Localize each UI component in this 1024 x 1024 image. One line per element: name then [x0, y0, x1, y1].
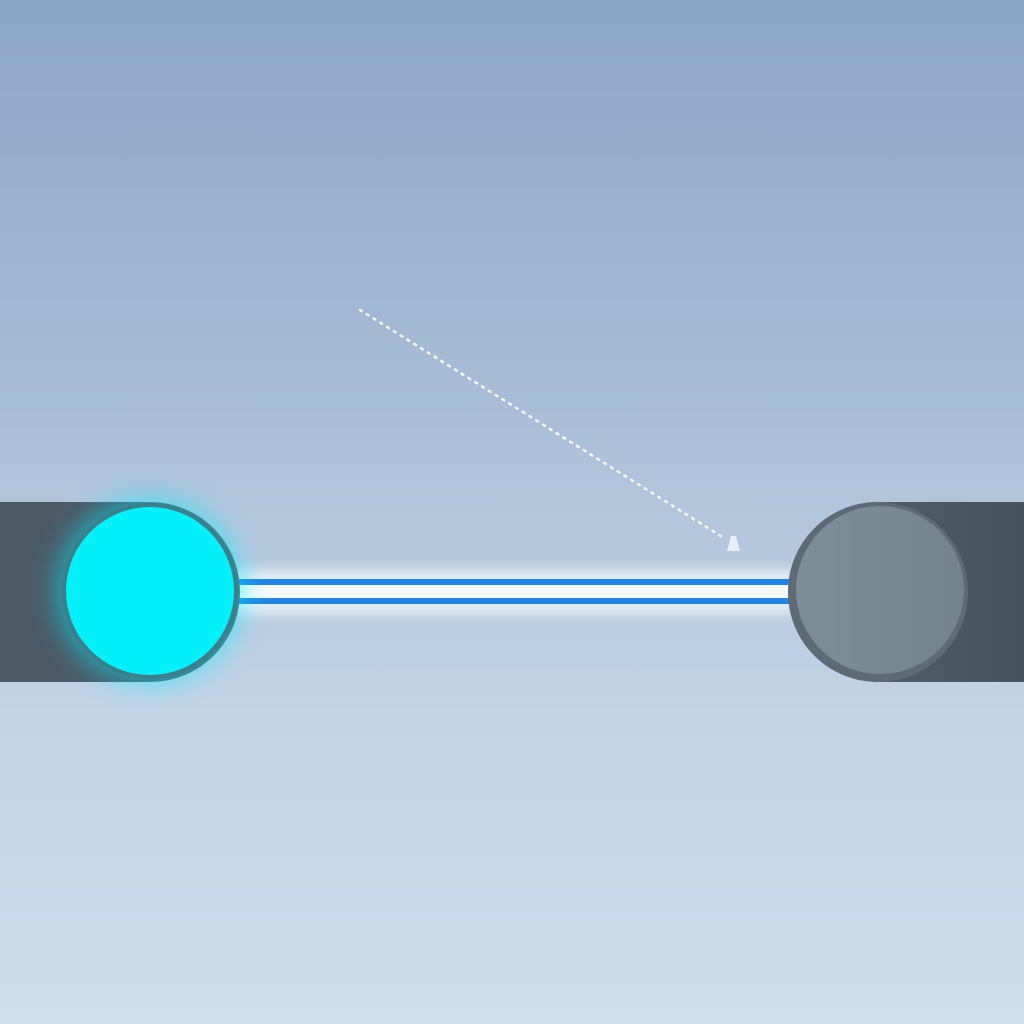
left node: active — [0, 499, 242, 683]
dotted arrow — [360, 310, 740, 551]
right node: inactive — [788, 502, 1024, 682]
connector beam — [230, 570, 795, 614]
